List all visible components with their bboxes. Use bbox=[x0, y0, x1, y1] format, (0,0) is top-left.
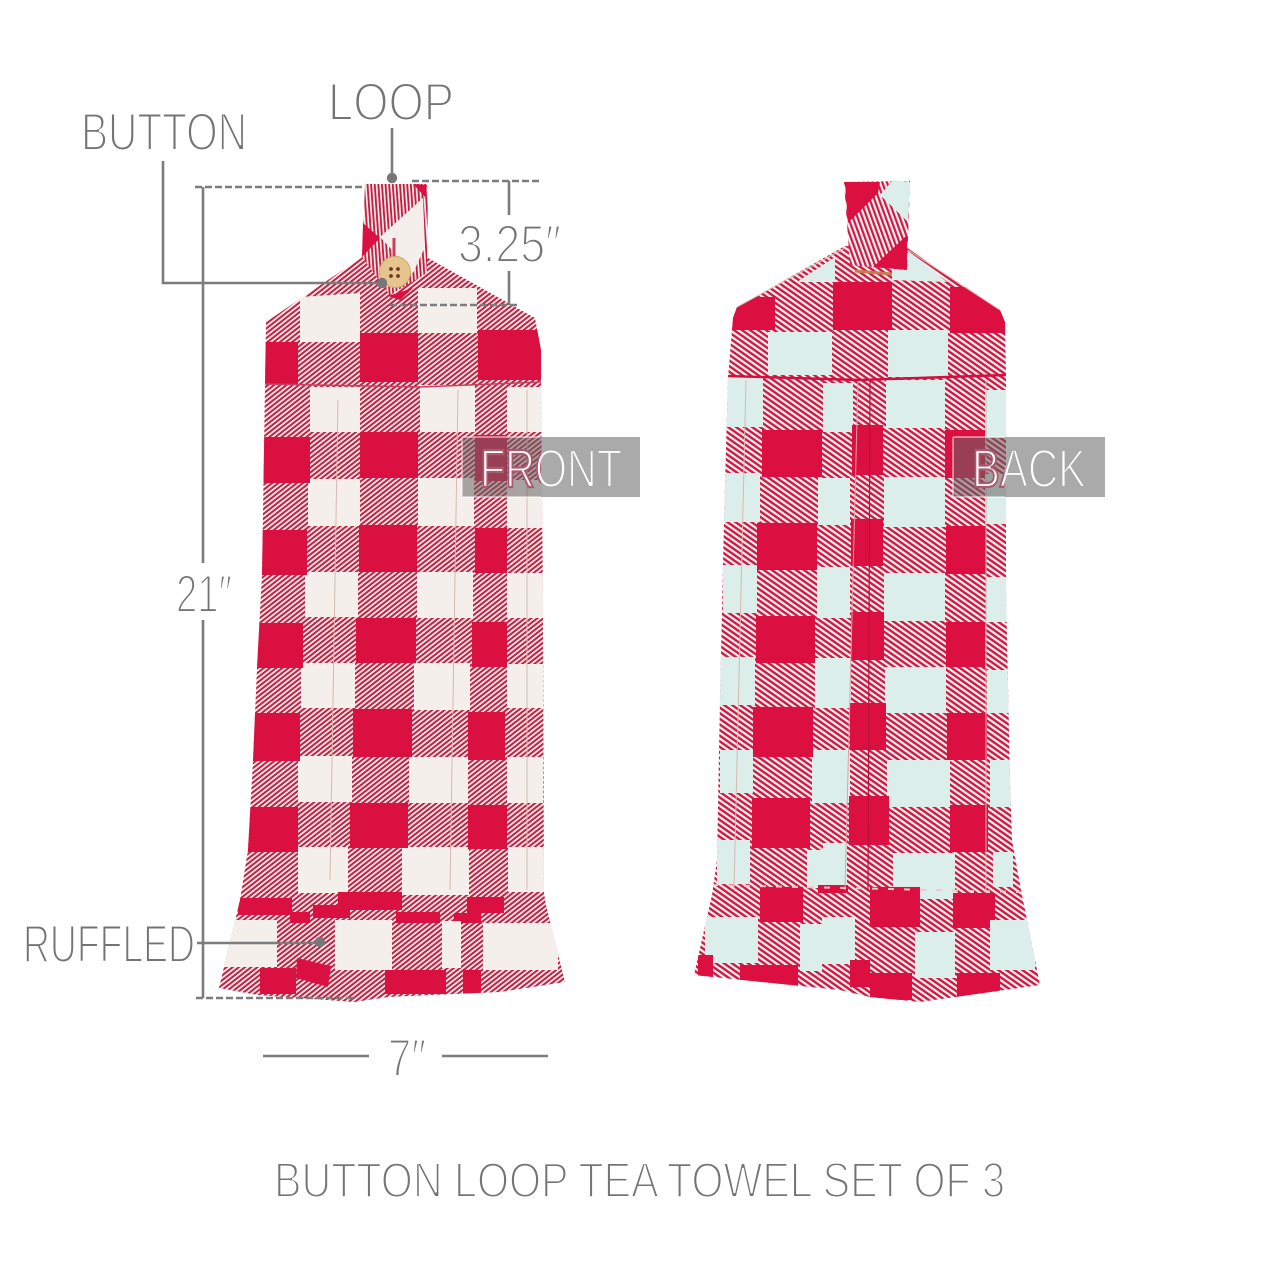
dimension: width 7 in: 7″ bbox=[388, 1029, 426, 1088]
dimension: overall height 21 in: 21″ bbox=[176, 565, 232, 624]
loop tab, front bbox=[362, 184, 428, 300]
icon: wooden button bbox=[380, 256, 410, 288]
dimension: loop 3.25 in: 3.25″ bbox=[458, 215, 561, 274]
callout: ruffled: RUFFLED bbox=[23, 915, 195, 974]
callout: button bbox=[81, 103, 387, 288]
callout: button: BUTTON bbox=[81, 103, 247, 162]
loop tab, back bbox=[844, 180, 910, 274]
callout: loop: LOOP bbox=[328, 73, 454, 132]
title: BUTTON LOOP TEA TOWEL SET OF 3 bbox=[274, 1154, 1005, 1208]
callout: loop bbox=[328, 73, 454, 183]
front towel photo bbox=[210, 184, 570, 1010]
label: front: FRONT bbox=[480, 439, 622, 499]
back towel photo bbox=[685, 180, 1050, 1010]
label: back: BACK bbox=[972, 439, 1086, 499]
